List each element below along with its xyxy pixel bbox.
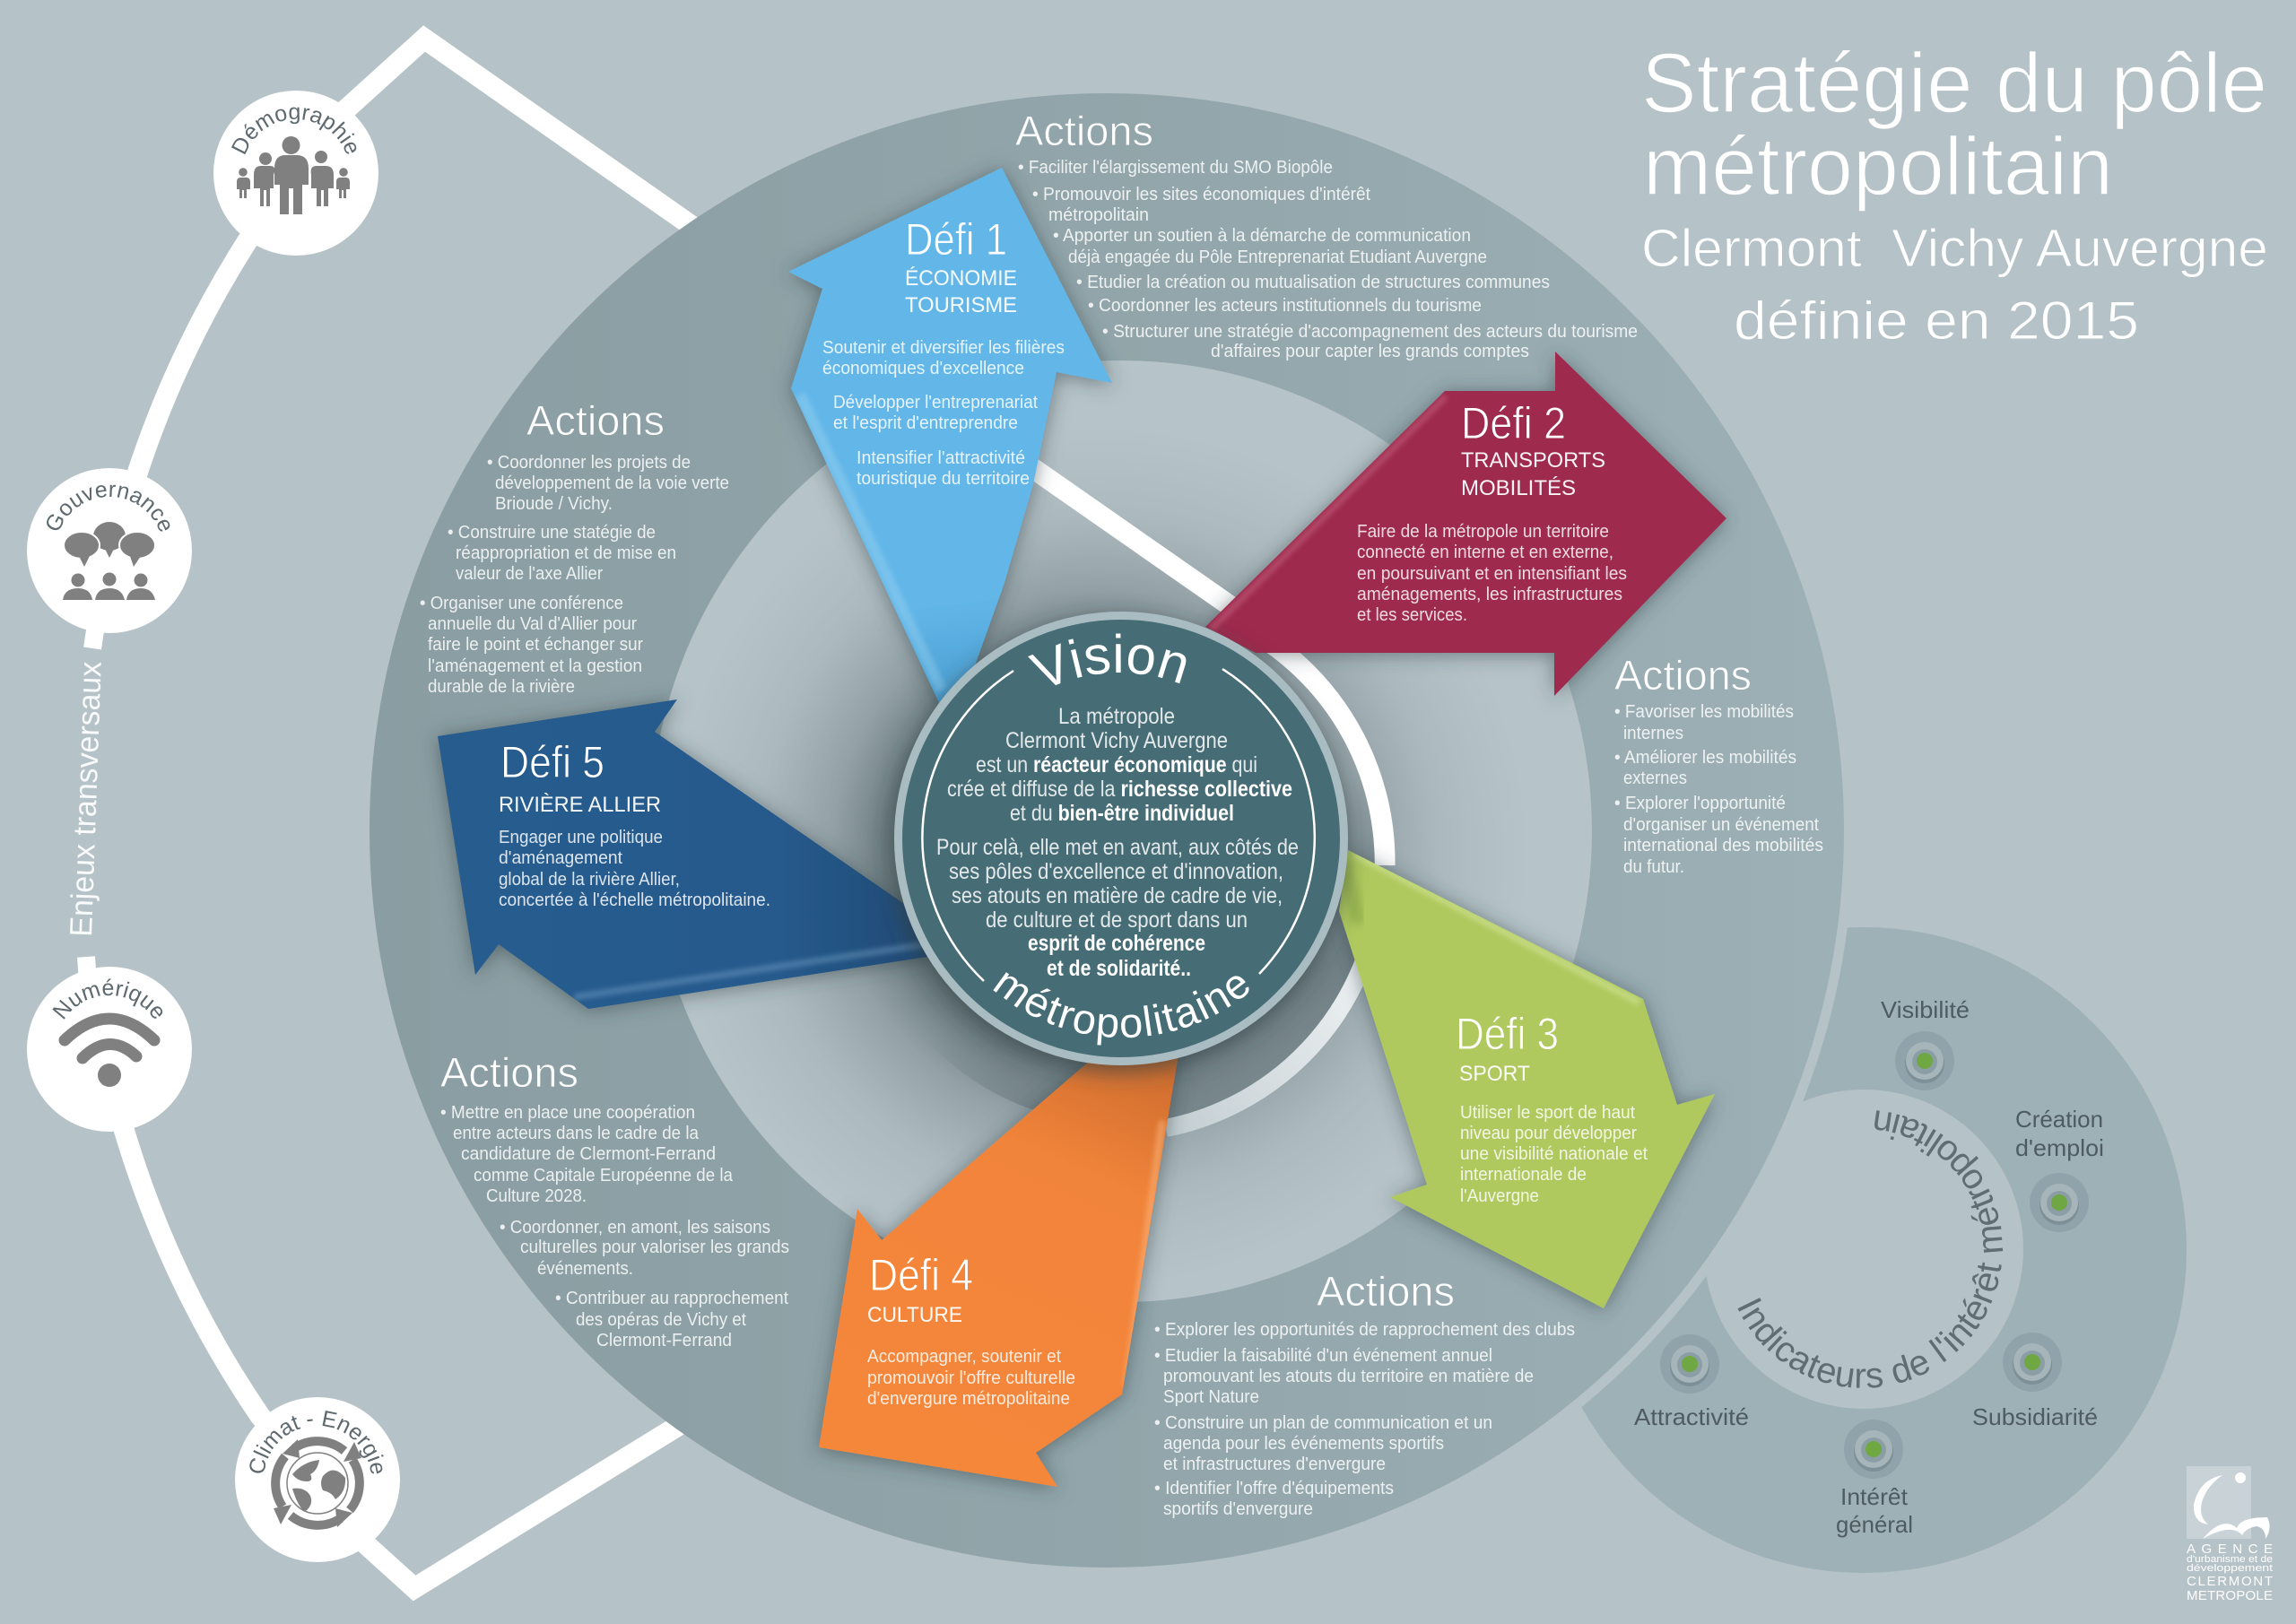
curved title: métropolitaine: métropolitaine [993,972,1248,1046]
subheading: TOURISME [905,293,1017,317]
text block: actions Défi 1: déjà engagée du Pôle Entreprenariat Etudiant Auvergne [1068,248,1487,267]
description: et les services. [1357,605,1467,625]
text block: actions Défi 3: sportifs d'envergure [1163,1499,1313,1519]
heading: Défi 1 [905,214,1007,265]
description: aménagements, les infrastructures [1357,585,1622,604]
text block: actions Défi 5: • Organiser une conférence [420,594,623,613]
text block: actions Défi 5: • Construire une statégie de [448,523,656,543]
description: en poursuivant et en intensifiant les [1357,564,1627,584]
description [867,1347,1075,1409]
logo: Agence d'urbanisme Clermont Métropole: d'urbanisme et de [2187,1554,2273,1565]
indicator button: Création d'emploi: d'emploi [2015,1134,2104,1161]
logo: Agence d'urbanisme Clermont Métropole: CLERMONT [2187,1574,2273,1589]
subheading [1461,448,1605,500]
text block: actions Défi 2: internes [1623,724,1683,743]
description: Engager une politique [499,828,663,847]
description: d'aménagement [499,848,622,868]
indicator button: Attractivité [1634,1334,1749,1430]
text block: actions Défi 2: • Explorer l'opportunité [1614,794,1786,813]
text block: actions Défi 4 [440,1049,789,1350]
description: Soutenir et diversifier les filières [822,338,1065,358]
heading: Défi 2 [1461,398,1566,448]
icon: speech bubbles and people [63,522,155,600]
text block: actions Défi 2: Actions [1614,652,1752,699]
vision statement: Pour celà, elle met en avant, aux côtés de [936,835,1299,860]
text block: actions Défi 5: Actions [526,397,665,444]
circle: Numérique [27,967,192,1132]
text block: actions Défi 5: faire le point et échanger sur [428,635,643,655]
subheading: ÉCONOMIE [905,266,1017,291]
central shading [668,426,1529,1287]
logo: Agence d'urbanisme Clermont Métropole [2187,1466,2273,1603]
panel: Défi 2 [1205,352,1726,696]
text block: actions Défi 1 [1015,108,1638,361]
curved title: Vision: Vision [1028,633,1186,685]
description [1460,1103,1648,1206]
text block: actions Défi 3: • Explorer les opportunités de rapprochement des clubs [1154,1320,1575,1340]
description: une visibilité nationale et [1460,1144,1648,1164]
text block: actions Défi 4: candidature de Clermont-Ferrand [461,1144,716,1164]
logo: Agence d'urbanisme Clermont Métropole: développement [2187,1563,2273,1574]
text block: actions Défi 1: d'affaires pour capter les grands comptes [1211,342,1529,361]
heading: Défi 3 [1456,1009,1559,1059]
white connector line: enjeux transversaux [86,39,897,1588]
description [499,828,770,910]
indicator button: Visibilité: Visibilité [1881,996,1970,1023]
rotated label: Enjeux transversaux: Enjeux transversaux [64,661,109,937]
text block: actions Défi 1: • Etudier la création ou mutualisation de structures communes [1076,273,1550,292]
description: promouvoir l'offre culturelle [867,1368,1075,1388]
description: niveau pour développer [1460,1124,1637,1143]
text block: actions Défi 5: • Coordonner les projets de [487,453,691,473]
text block: actions Défi 2: international des mobilités [1623,836,1823,855]
text block: actions Défi 3: • Construire un plan de communication et un [1154,1413,1492,1433]
title: Stratégie du pôle [1641,36,2267,131]
title [1641,36,2268,351]
title: métropolitain [1643,121,2113,213]
subheading: TRANSPORTS [1461,448,1605,473]
text block: actions Défi 3: • Identifier l'offre d'équipements [1154,1479,1394,1498]
text block: actions Défi 1: métropolitain [1048,205,1149,225]
description: concertée à l'échelle métropolitaine. [499,890,770,910]
circle: Climat - Energie [235,1397,400,1562]
shadow beneath centre circle [858,607,1375,1124]
circle: Démographie: Démographie [231,108,357,154]
text block: actions Défi 3: • Etudier la faisabilité d'un événement annuel [1154,1346,1492,1366]
circle: Gouvernance [27,468,192,633]
panel: Défi 4 [819,1049,1179,1487]
panel: Défi 1 [788,168,1112,708]
description: d'envergure métropolitaine [867,1389,1070,1409]
description: global de la rivière Allier, [499,870,680,890]
panel: vision centre circle [883,605,1360,1089]
text block: actions Défi 5: développement de la voie verte [495,473,729,493]
subheading: RIVIÈRE ALLIER [499,793,661,817]
indicator button: Visibilité [1881,996,1970,1090]
vision statement: ses pôles d'excellence et d'innovation, [949,859,1283,884]
description [1357,522,1627,625]
text block: actions Défi 4: Clermont-Ferrand [596,1331,732,1350]
vision statement: ses atouts en matière de cadre de vie, [952,883,1283,908]
icon: globe with arrows [274,1439,361,1527]
text block: actions Défi 2: d'organiser un événement [1623,815,1819,835]
text block: actions Défi 4: • Contribuer au rapprochement [555,1289,788,1308]
text block: actions Défi 2: • Favoriser les mobilités [1614,702,1794,722]
indicator button: Création d'emploi: Création [2015,1106,2103,1133]
vision statement [936,704,1299,981]
text block: actions Défi 3: agenda pour les événements sportifs [1163,1434,1444,1454]
subheading: MOBILITÉS [1461,476,1576,500]
text block: actions Défi 5: l'aménagement et la gestion [428,656,642,676]
description [822,338,1065,489]
subheading: CULTURE [867,1303,962,1327]
heading: Défi 5 [500,737,604,787]
description: Développer l'entreprenariat [833,393,1038,413]
description: Intensifier l'attractivité [857,448,1025,468]
text block: actions Défi 3: Actions [1317,1268,1455,1315]
text block: actions Défi 2 [1614,652,1823,877]
large ring disc [370,93,1844,1568]
text block: actions Défi 5: réappropriation et de mise en [456,543,676,563]
text block: actions Défi 2: • Améliorer les mobilités [1614,748,1796,768]
description: connecté en interne et en externe, [1357,543,1613,562]
text block: actions Défi 3 [1154,1268,1575,1519]
title: définie en 2015 [1734,291,2139,351]
text block: actions Défi 4: des opéras de Vichy et [576,1310,746,1330]
text block: actions Défi 4: • Mettre en place une coopération [440,1103,695,1123]
title: Clermont Vichy Auvergne [1641,219,2268,278]
text block: actions Défi 2: externes [1623,769,1687,788]
indicator button: Intérêt général [1836,1420,1913,1538]
vision statement: esprit de cohérence [1028,931,1205,956]
white line inside disc and arc around the vision [1013,455,1385,865]
description: Utiliser le sport de haut [1460,1103,1635,1123]
fading lower arc [1166,951,1368,1128]
text block: actions Défi 5: Brioude / Vichy. [495,494,613,514]
text block: actions Défi 4: • Coordonner, en amont, les saisons [500,1218,770,1238]
indicators ring text: Indicateurs de l'intérêt métropolitain [1738,1110,2004,1388]
text block: actions Défi 4: Actions [440,1049,578,1096]
description: et l'esprit d'entreprendre [833,413,1018,433]
indicator button: Subsidiarité: Subsidiarité [1972,1403,2098,1430]
text block: actions Défi 4: culturelles pour valoriser les grands [520,1238,789,1257]
text block: actions Défi 2: du futur. [1623,857,1684,877]
text block: actions Défi 3: et infrastructures d'envergure [1163,1455,1386,1474]
inner light disc [650,360,1592,1302]
subheading: SPORT [1459,1062,1530,1086]
description: l'Auvergne [1460,1186,1539,1206]
text block: actions Défi 1: Actions [1015,108,1153,154]
vision statement: La métropole [1058,704,1175,729]
vision statement: Clermont Vichy Auvergne [1005,728,1228,753]
circle: Démographie [213,91,378,256]
description: Faire de la métropole un territoire [1357,522,1609,542]
vision statement: est un réacteur économique qui [976,752,1257,777]
text block: actions Défi 4: entre acteurs dans le cadre de la [453,1124,700,1143]
logo: Agence d'urbanisme Clermont Métropole: AGENCE [2187,1541,2273,1557]
panel: Défi 5 [438,699,933,1009]
text block: actions Défi 1: • Coordonner les acteurs institutionnels du tourisme [1088,296,1482,316]
icon: wifi [65,1019,154,1087]
vision statement: crée et diffuse de la richesse collective [947,777,1292,802]
circle: Gouvernance: Gouvernance [47,484,170,532]
text block: actions Défi 5 [420,397,729,697]
panel: Défi 3 [1339,850,1715,1308]
vision statement: et de solidarité.. [1047,956,1191,981]
text block: actions Défi 4: événements. [537,1259,633,1279]
indicator button: Intérêt général: général [1836,1511,1913,1538]
description: internationale de [1460,1165,1587,1185]
text block: actions Défi 1: • Faciliter l'élargissement du SMO Biopôle [1018,158,1333,178]
logo: Agence d'urbanisme Clermont Métropole: METROPOLE [2187,1588,2273,1603]
text block: actions Défi 4: Culture 2028. [486,1186,587,1206]
text block: actions Défi 5: durable de la rivière [428,677,575,697]
text block: actions Défi 4: comme Capitale Européenne de la [474,1166,734,1185]
circle: Numérique: Numérique [52,979,163,1020]
indicator button: Intérêt général: Intérêt [1840,1483,1909,1510]
subheading [905,266,1017,317]
circle: Climat - Energie: Climat - Energie [249,1411,384,1474]
text block: actions Défi 1: • Structurer une stratégie d'accompagnement des acteurs du tourisme [1102,322,1638,342]
vision statement: de culture et de sport dans un [986,908,1248,933]
text block: actions Défi 5: valeur de l'axe Allier [456,564,603,584]
text block: actions Défi 3: Sport Nature [1163,1387,1259,1407]
indicator button: Subsidiarité [1972,1333,2098,1430]
text block: actions Défi 1: • Promouvoir les sites économiques d'intérêt [1032,185,1370,204]
description: économiques d'excellence [822,359,1024,378]
text block: actions Défi 5: annuelle du Val d'Allier pour [428,614,637,634]
text block: actions Défi 3: promouvant les atouts du territoire en matière de [1163,1367,1534,1386]
indicator button: Création d'emploi [2015,1106,2104,1232]
description: Accompagner, soutenir et [867,1347,1061,1367]
icon: family [237,136,350,214]
indicator button: Attractivité: Attractivité [1634,1403,1749,1430]
description: touristique du territoire [857,469,1030,489]
text block: actions Défi 1: • Apporter un soutien à la démarche de communication [1053,226,1471,246]
heading: Défi 4 [869,1250,973,1300]
panel: indicateurs de l'intérêt métropolitain [360,83,2187,1577]
vision statement: et du bien-être individuel [1010,801,1234,826]
